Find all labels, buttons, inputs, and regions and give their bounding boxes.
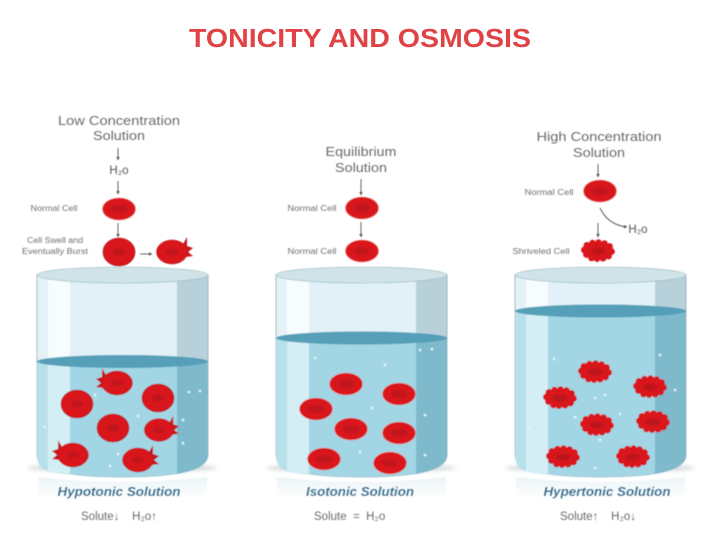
solute and water relation: Solute = H₂o	[314, 511, 385, 523]
reflection	[277, 477, 446, 499]
panel: isotonic	[266, 144, 456, 523]
label: shriveled cell: Shriveled Cell	[512, 247, 570, 256]
shadow	[266, 465, 456, 471]
reflection	[516, 477, 685, 499]
water	[37, 355, 208, 477]
label: normal cell: Normal Cell	[288, 204, 337, 213]
solution name: Isotonic Solution	[306, 484, 414, 499]
solution name: Hypertonic Solution	[544, 484, 671, 499]
icon: normal cell	[346, 240, 378, 262]
label: water: H₂o	[109, 165, 129, 177]
cells in hypotonic solution	[52, 368, 179, 472]
water	[515, 304, 686, 477]
solute and water relation: Solute↑ H₂o↓	[560, 511, 636, 523]
label: normal cell: Normal Cell	[288, 247, 337, 256]
arrow: solution to cell	[360, 179, 362, 195]
panel: hypertonic	[505, 129, 695, 523]
panel: hypotonic	[22, 113, 217, 523]
arrow: swollen to burst	[140, 253, 152, 255]
arrow: solution to water	[117, 148, 119, 160]
icon: swollen cell	[103, 238, 135, 266]
title: TONICITY AND OSMOSIS	[189, 23, 531, 53]
arrow: water leaving cell	[600, 208, 627, 227]
flow heading: high concentration: Solution	[573, 145, 625, 160]
beaker: isotonic	[266, 267, 456, 477]
icon: burst cell	[156, 237, 193, 264]
icon: normal cell	[584, 180, 616, 202]
flow heading: low concentration: Low Concentration	[58, 113, 180, 128]
solution name: Hypotonic Solution	[58, 484, 181, 499]
label: cell swell and burst: Eventually Burst	[22, 247, 89, 256]
solute and water relation: Solute↓ H₂o↑	[81, 511, 157, 523]
cells in isotonic solution	[300, 373, 416, 474]
beaker: hypertonic	[505, 267, 695, 477]
label: cell swell and burst: Cell Swell and	[27, 236, 83, 245]
bubbles	[44, 390, 201, 467]
arrow: cell to cell	[360, 222, 362, 237]
flow heading: low concentration	[58, 113, 180, 143]
beaker: hypotonic	[27, 267, 217, 477]
icon: normal cell	[346, 197, 378, 219]
cells in hypertonic solution	[543, 360, 670, 468]
label: normal cell: Normal Cell	[30, 204, 78, 213]
label: water: H₂o	[628, 224, 648, 236]
flow heading: equilibrium	[326, 144, 396, 175]
arrow: solution to cell	[597, 164, 599, 177]
shadow	[27, 465, 217, 471]
flow heading: high concentration: High Concentration	[536, 129, 662, 144]
flow heading: high concentration	[536, 129, 662, 160]
arrow: normal to swollen	[117, 223, 119, 237]
flow heading: equilibrium: Solution	[335, 160, 387, 175]
flow heading: low concentration: Solution	[93, 128, 145, 143]
bubbles	[299, 348, 433, 456]
arrow: water to cell	[117, 181, 119, 194]
shadow	[505, 465, 695, 471]
label: normal cell: Normal Cell	[524, 188, 574, 197]
bubbles	[529, 354, 676, 469]
water	[276, 332, 447, 477]
flow heading: equilibrium: Equilibrium	[326, 144, 396, 159]
label: cell swell and burst	[22, 236, 89, 256]
icon: normal cell	[102, 198, 136, 220]
arrow: normal to shrivelled	[597, 223, 599, 237]
icon: shriveled cell	[581, 239, 615, 262]
reflection	[38, 477, 207, 499]
